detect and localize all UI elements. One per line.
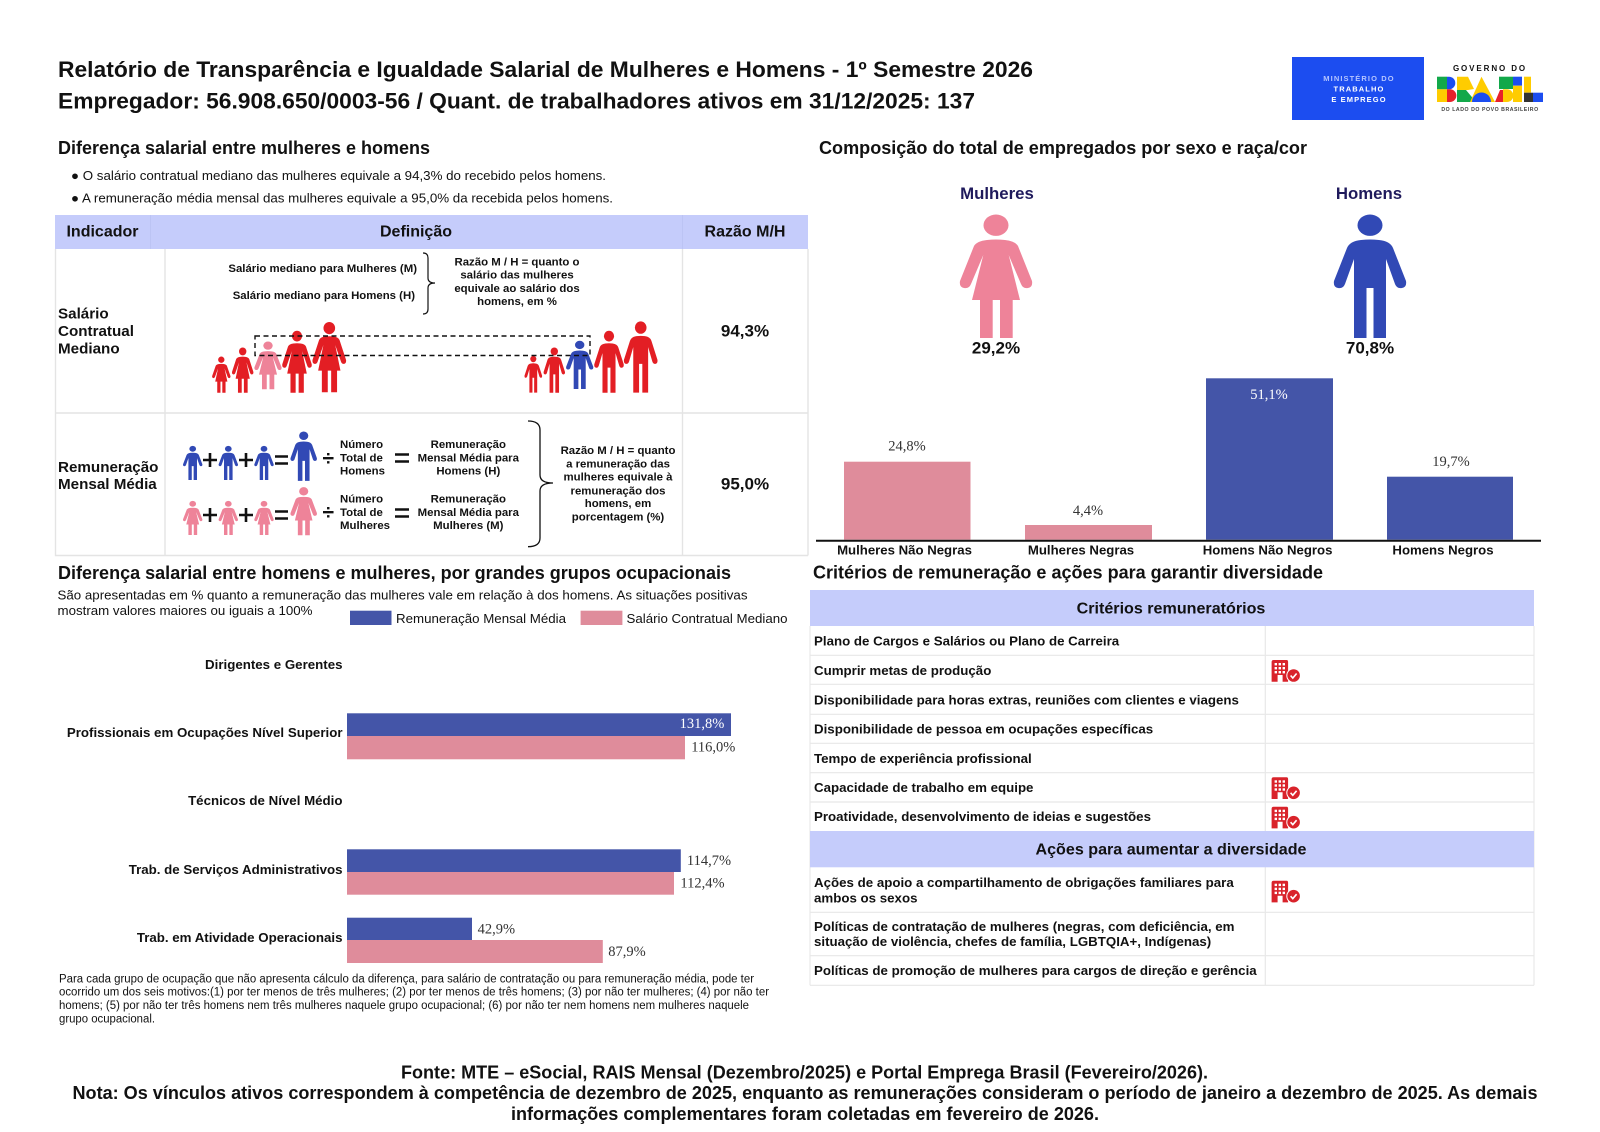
action rows xyxy=(814,875,1257,978)
row label: Salário Contratual Mediano xyxy=(58,306,134,358)
table header: Indicador xyxy=(66,224,139,240)
brace and ratio explanation: remuneração dos xyxy=(571,485,665,497)
brace and ratio explanation xyxy=(528,421,675,547)
value: 94,3%: 94,3% xyxy=(721,322,769,340)
men share: 70,8% xyxy=(1346,338,1394,358)
icon: company check, proatividade xyxy=(1272,807,1300,829)
chart description: São apresentadas em % quanto a remuneração das mulheres vale em relação à dos homens. As situações positivas xyxy=(58,588,748,602)
bar chart: occupational groups: 112,4% xyxy=(680,876,725,892)
bar chart: sex and race composition: 4,4% xyxy=(1073,503,1103,519)
footer: source and note: informações complementares foram coletadas em fevereiro de 2026. xyxy=(511,1104,1099,1124)
men share: Homens xyxy=(1336,184,1402,203)
brace and ratio explanation: a remuneração das xyxy=(566,459,670,471)
bar chart: sex and race composition: 19,7% xyxy=(1432,454,1470,470)
logo: Ministério do Trabalho e Emprego: MINISTÉRIO DO xyxy=(1323,74,1395,83)
bar chart: sex and race composition: Mulheres Não Negras xyxy=(837,542,972,558)
I xyxy=(1513,77,1522,86)
A xyxy=(1470,77,1495,102)
value: 95,0%: 95,0% xyxy=(721,474,769,494)
bar chart: occupational groups: 131,8% xyxy=(680,716,724,732)
median definition text: equivale ao salário dos xyxy=(454,283,580,295)
action rows: Ações de apoio a compartilhamento de obrigações familiares para xyxy=(814,875,1234,890)
median definition text: Salário mediano para Homens (H) xyxy=(233,290,415,302)
women share xyxy=(960,184,1034,358)
formula: women average: Mulheres xyxy=(340,520,390,532)
legend xyxy=(350,611,788,626)
table header: Definição xyxy=(380,224,452,240)
icon: five men, median highlighted xyxy=(524,321,658,393)
formula: men average: Número xyxy=(340,439,383,451)
median definition text: Razão M / H = quanto o xyxy=(454,256,580,268)
title xyxy=(58,57,1033,114)
bullet list xyxy=(71,168,613,206)
formula: women average: Mulheres (M) xyxy=(433,520,504,532)
bullet list: ● A remuneração média mensal das mulheres equivale a 95,0% da recebida pelos homens. xyxy=(71,190,613,206)
logo: Governo do Brasil: DO LADO DO POVO BRASILEIRO xyxy=(1441,107,1539,113)
criteria rows: Proatividade, desenvolvimento de ideias e sugestões xyxy=(814,809,1151,824)
bar chart: occupational groups: Trab. de Serviços Administrativos xyxy=(129,862,342,877)
icon: company check, compartilhamento xyxy=(1272,881,1300,903)
header: ações para aumentar a diversidade xyxy=(810,831,1534,867)
chart description xyxy=(58,588,748,618)
bar chart: occupational groups: 42,9% xyxy=(478,922,515,938)
table header: Razão M/H xyxy=(705,224,785,240)
logo: Governo do Brasil: GOVERNO DO xyxy=(1453,64,1527,73)
women share: 29,2% xyxy=(972,338,1020,358)
criteria rows: Cumprir metas de produção xyxy=(814,663,991,678)
brace and ratio explanation: Razão M / H = quanto xyxy=(561,445,675,457)
legend: Remuneração Mensal Média xyxy=(396,611,567,626)
L xyxy=(1524,77,1531,93)
action rows: Políticas de contratação de mulheres (negras, com deficiência, em xyxy=(814,919,1234,934)
footnote: homens; (5) por não ter três homens nem três mulheres naquele grupo ocupacional; (6) por não ter nem homens nem mulheres naquele xyxy=(59,1000,749,1012)
median definition text: salário das mulheres xyxy=(460,270,574,282)
criteria rows: Tempo de experiência profissional xyxy=(814,751,1032,766)
women share: Mulheres xyxy=(960,184,1034,203)
footer: source and note xyxy=(72,1062,1538,1124)
icon: five women, median highlighted xyxy=(212,322,346,393)
bar chart: occupational groups: 114,7% xyxy=(687,853,731,869)
formula: women average: Total de xyxy=(340,507,383,519)
formula: men average: ÷ xyxy=(323,448,335,470)
bar chart: occupational groups: Profissionais em Ocupações Nível Superior xyxy=(67,725,342,740)
footnote xyxy=(59,973,769,1025)
row label: Salário Contratual Mediano: Contratual xyxy=(58,323,134,340)
criteria rows: Disponibilidade para horas extras, reuniões com clientes e viagens xyxy=(814,692,1239,708)
logo: Governo do Brasil xyxy=(1437,64,1543,113)
action rows: situação de violência, chefes de família, LGBTQIA+, Indígenas) xyxy=(814,934,1211,949)
header: critérios remuneratórios: Critérios remuneratórios xyxy=(1077,600,1265,618)
bar chart: sex and race composition: Mulheres Negras xyxy=(1028,542,1134,558)
bullet list: ● O salário contratual mediano das mulheres equivale a 94,3% do recebido pelos homens. xyxy=(71,168,606,183)
row label: Remuneração Mensal Média xyxy=(58,459,158,493)
brace and ratio explanation: homens, em xyxy=(585,498,651,510)
header: critérios remuneratórios xyxy=(810,590,1534,626)
bar chart: sex and race composition: Homens Negros xyxy=(1392,542,1494,558)
footnote: Para cada grupo de ocupação que não apresenta cálculo da diferença, para salário de contratação ou para remuneração média, pode ter xyxy=(59,973,754,985)
legend: Salário Contratual Mediano xyxy=(626,611,788,626)
median definition text: Salário mediano para Mulheres (M) xyxy=(228,263,417,275)
bar chart: sex and race composition: 24,8% xyxy=(888,439,926,455)
panel: criteria table xyxy=(810,590,1534,985)
logo: Ministério do Trabalho e Emprego xyxy=(1292,57,1424,120)
table header xyxy=(55,215,808,249)
bar chart: occupational groups: 116,0% xyxy=(691,740,735,756)
formula: women average: ÷ xyxy=(323,502,335,524)
heading: criteria: Critérios de remuneração e ações para garantir diversidade xyxy=(813,563,1323,583)
icon: company check, produção xyxy=(1272,660,1300,682)
title: Relatório de Transparência e Igualdade Salarial de Mulheres e Homens - 1º Semestre 2026 xyxy=(58,57,1033,82)
bar chart: occupational groups: Técnicos de Nível Médio xyxy=(188,793,342,808)
footer: source and note: Fonte: MTE – eSocial, RAIS Mensal (Dezembro/2025) e Portal Emprega Brasil (Fevereiro/2026). xyxy=(401,1062,1208,1082)
formula: men average: Remuneração xyxy=(431,439,506,451)
row label: Remuneração Mensal Média: Mensal Média xyxy=(58,476,157,493)
formula: men average: Mensal Média para xyxy=(418,452,520,464)
criteria rows: Plano de Cargos e Salários ou Plano de Carreira xyxy=(814,634,1120,648)
bar chart: occupational groups: Dirigentes e Gerentes xyxy=(205,657,342,672)
formula: women average: Remuneração xyxy=(431,494,506,506)
heading: salary gap: Diferença salarial entre mulheres e homens xyxy=(58,138,430,158)
B xyxy=(1437,77,1447,89)
footer: source and note: Nota: Os vínculos ativos correspondem à competência de dezembro de 2025, enquanto as remunerações consideram o período de janeiro a dezembro de 2025. As demais xyxy=(72,1083,1538,1103)
formula: men average: Homens (H) xyxy=(436,465,500,477)
row label: Remuneração Mensal Média: Remuneração xyxy=(58,459,158,476)
bar chart: sex and race composition xyxy=(816,378,1541,558)
row label: Salário Contratual Mediano: Salário xyxy=(58,306,109,322)
formula: men average: Total de xyxy=(340,452,383,464)
median definition text xyxy=(228,253,580,314)
bar chart: occupational groups: 87,9% xyxy=(608,944,646,960)
criteria rows: Disponibilidade de pessoa em ocupações específicas xyxy=(814,722,1153,736)
formula: men average xyxy=(183,432,520,481)
formula: women average xyxy=(183,487,520,535)
bar chart: occupational groups: Trab. em Atividade Operacionais xyxy=(137,930,342,945)
logo: Ministério do Trabalho e Emprego: TRABALHO xyxy=(1334,84,1384,94)
bar chart: occupational groups xyxy=(67,657,735,963)
criteria rows xyxy=(814,634,1239,824)
S xyxy=(1499,77,1513,89)
brace and ratio explanation: mulheres equivale à xyxy=(564,472,673,484)
footnote: grupo ocupacional. xyxy=(59,1013,155,1025)
footnote: ocorrido um dos seis motivos:(1) por ter menos de três mulheres; (2) por ter menos de três homens; (3) por não ter mulheres; (4) por não ter xyxy=(59,987,769,999)
brace and ratio explanation: porcentagem (%) xyxy=(572,511,664,523)
chart description: mostram valores maiores ou iguais a 100% xyxy=(58,603,313,618)
row label: Salário Contratual Mediano: Mediano xyxy=(58,340,120,358)
panel: indicator table xyxy=(55,215,808,556)
heading: composition: Composição do total de empregados por sexo e raça/cor xyxy=(819,138,1307,158)
men share xyxy=(1334,184,1406,358)
title: Empregador: 56.908.650/0003-56 / Quant. de trabalhadores ativos em 31/12/2025: 137 xyxy=(58,88,975,114)
R xyxy=(1457,77,1474,90)
criteria rows: Capacidade de trabalho em equipe xyxy=(814,780,1033,795)
median definition text: homens, em % xyxy=(477,296,557,308)
bar chart: sex and race composition: Homens Não Negros xyxy=(1203,542,1332,558)
bar chart: sex and race composition: 51,1% xyxy=(1250,387,1288,403)
formula: women average: Mensal Média para xyxy=(418,507,520,519)
action rows: ambos os sexos xyxy=(814,890,917,906)
formula: men average: Homens xyxy=(340,465,385,477)
logo: Ministério do Trabalho e Emprego: E EMPREGO xyxy=(1331,95,1387,104)
header: ações para aumentar a diversidade: Ações para aumentar a diversidade xyxy=(1035,841,1307,859)
icon: company check, equipe xyxy=(1272,777,1300,800)
formula: women average: Número xyxy=(340,494,383,506)
action rows: Políticas de promoção de mulheres para cargos de direção e gerência xyxy=(814,963,1257,978)
heading: occupational groups: Diferença salarial entre homens e mulheres, por grandes grupos ocupacionais xyxy=(58,563,731,583)
